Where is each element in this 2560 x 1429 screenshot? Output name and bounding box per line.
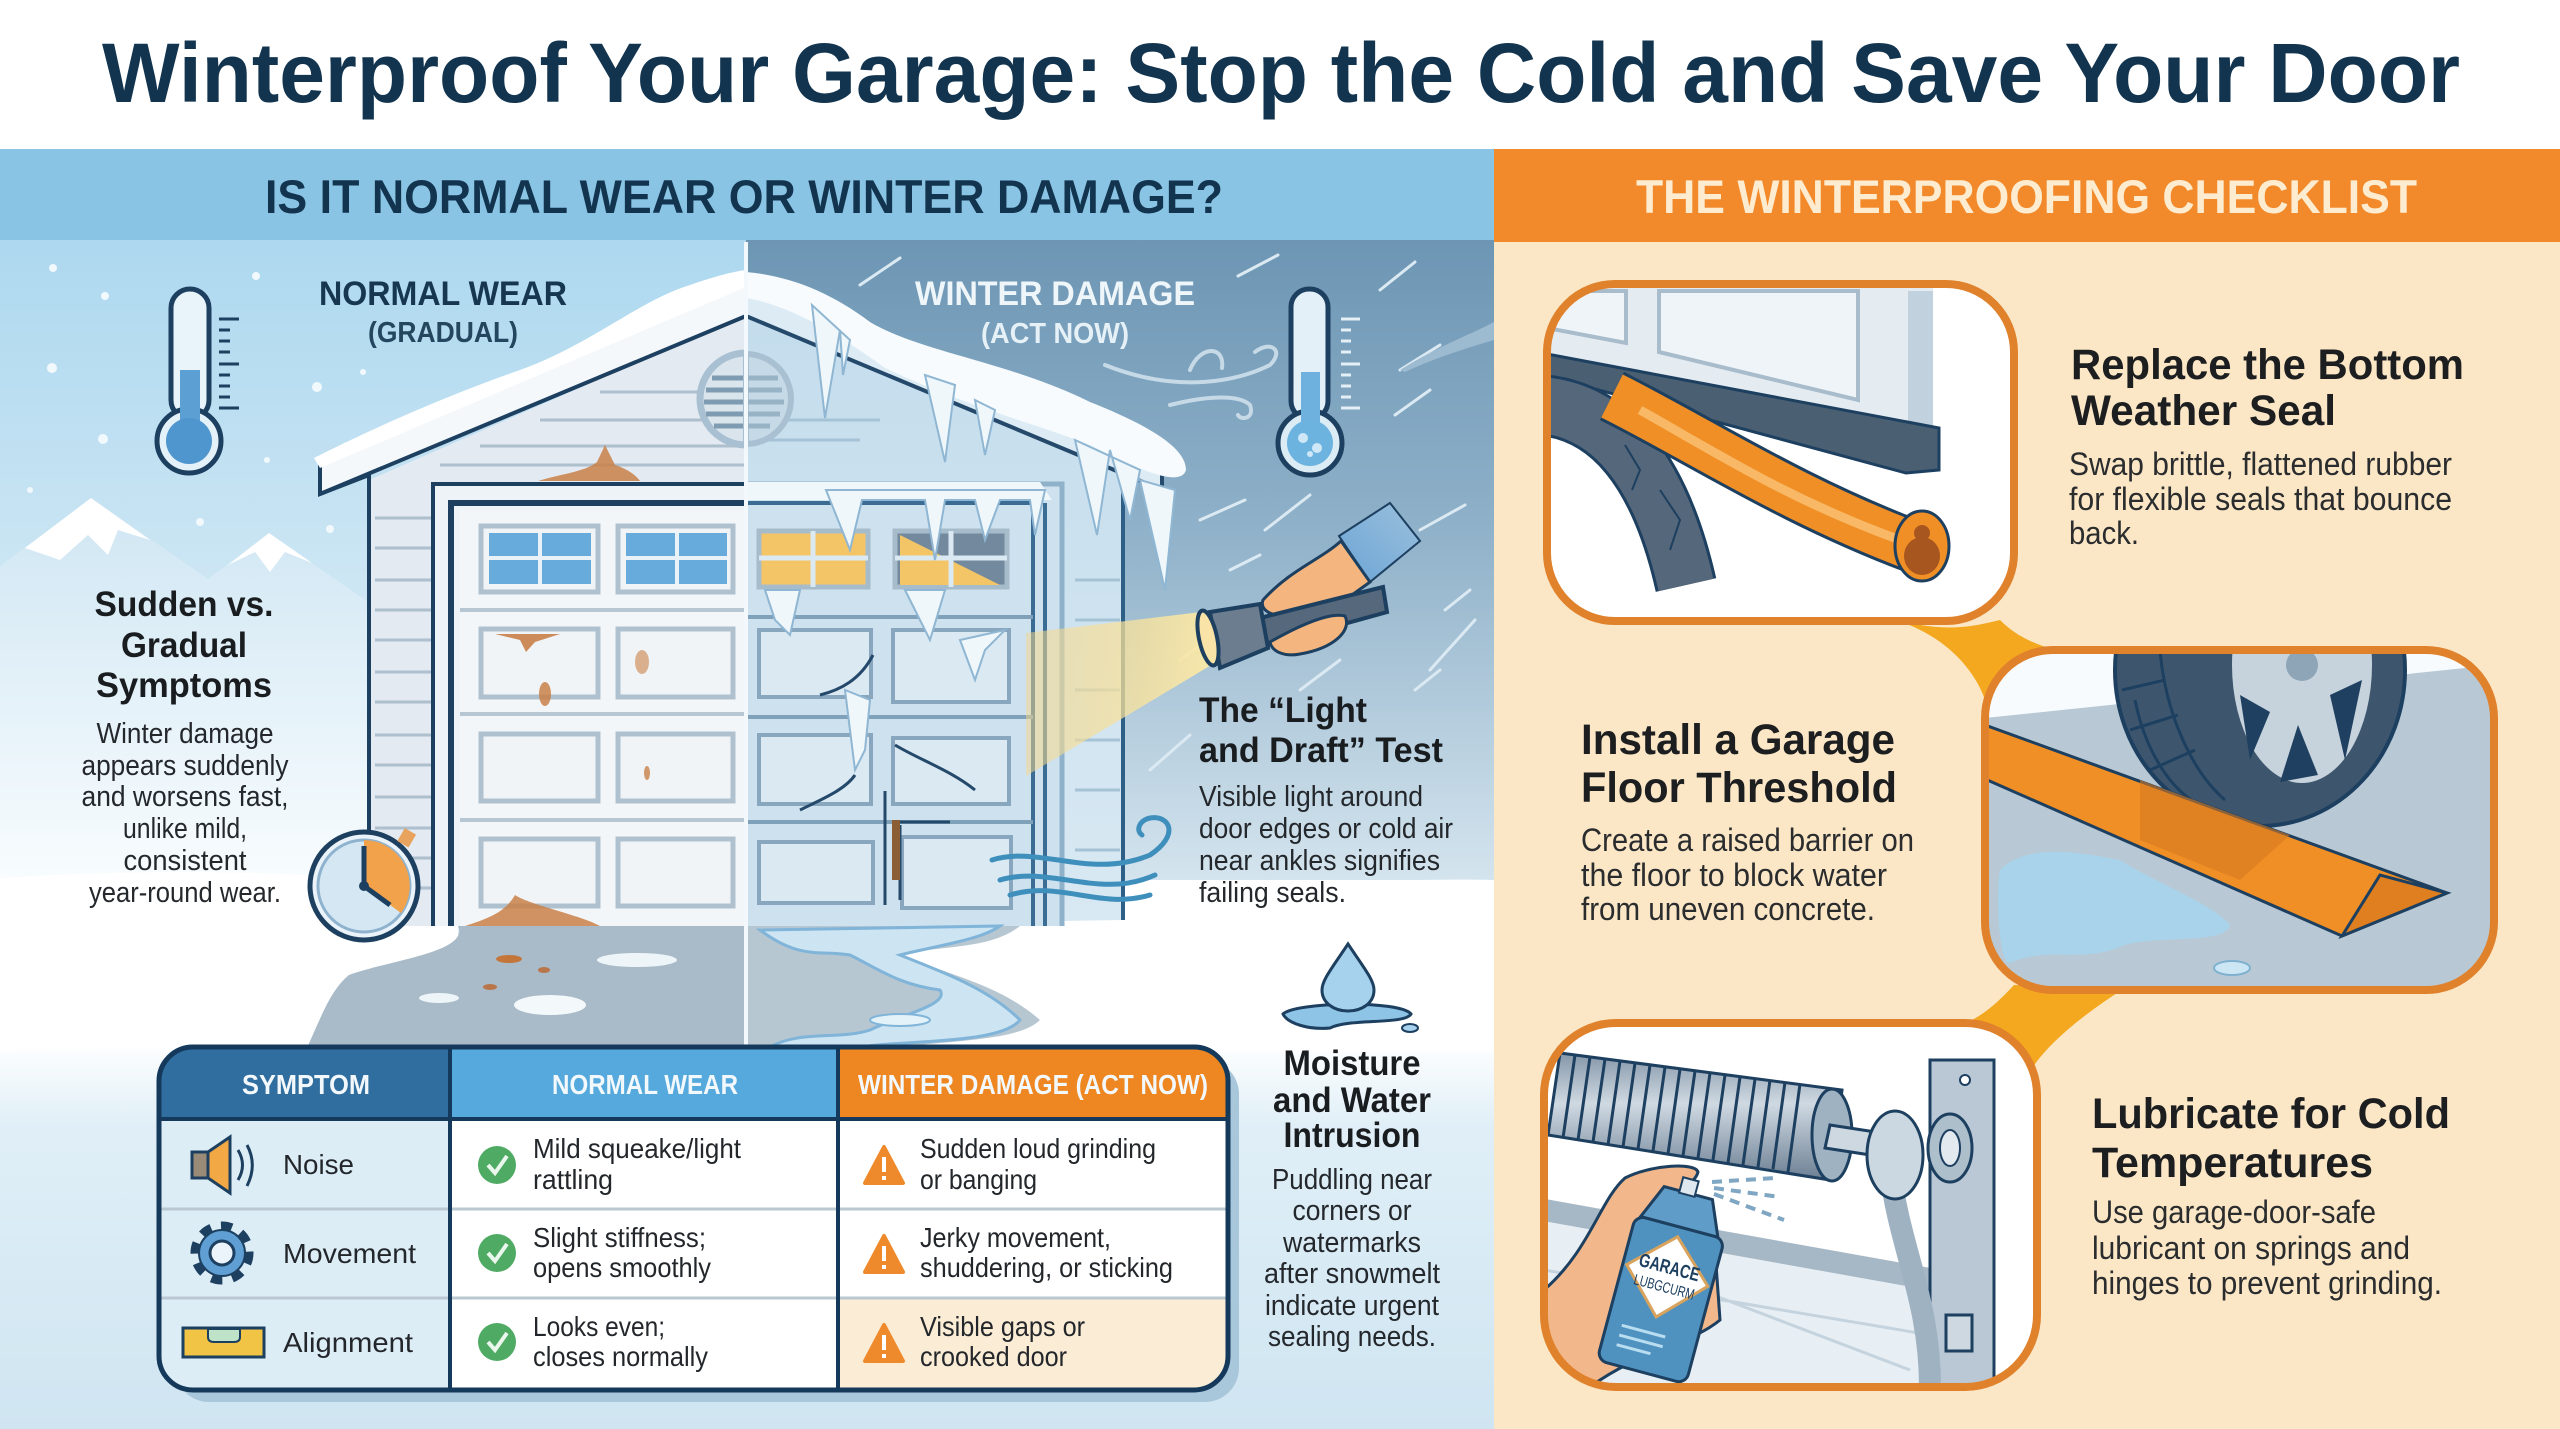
icon: level xyxy=(183,1328,264,1357)
thermometer: normal xyxy=(157,289,239,473)
text block: sudden vs gradual: consistent xyxy=(124,845,246,877)
panel: lower snow area xyxy=(0,1040,1494,1429)
table shadow xyxy=(175,1060,1239,1402)
title: Winterproof Your Garage: Stop the Cold and Save Your Door xyxy=(102,26,2460,120)
roof and snow: winter half xyxy=(746,272,1186,490)
text block: sudden vs gradual xyxy=(82,585,289,909)
table header labels: NORMAL WEAR xyxy=(552,1069,738,1100)
vent half xyxy=(746,354,791,444)
icon: gear xyxy=(195,1226,249,1280)
door frame xyxy=(433,484,746,926)
text block: light and draft test: and Draft” Test xyxy=(1199,731,1443,770)
text block: light and draft test: door edges or cold air xyxy=(1199,813,1453,845)
text block: moisture and water: Moisture xyxy=(1284,1044,1420,1083)
old cracked seal xyxy=(1540,405,1686,585)
label: winter damage: (ACT NOW) xyxy=(981,318,1129,350)
frozen door xyxy=(746,482,1062,926)
table header labels: WINTER DAMAGE (ACT NOW) xyxy=(858,1069,1208,1100)
rail xyxy=(1544,1210,1935,1280)
driveway concrete normal side xyxy=(306,926,746,1050)
roof: normal half xyxy=(314,270,746,494)
text block: moisture and water: sealing needs. xyxy=(1268,1321,1436,1353)
row: alignment: Alignment xyxy=(283,1327,413,1358)
tire xyxy=(2113,654,2407,828)
sleeve xyxy=(1339,503,1420,582)
panel: checklist background xyxy=(1494,242,2560,1429)
row: noise: Noise xyxy=(283,1149,354,1180)
icon: warning xyxy=(865,1147,903,1183)
text block: moisture and water: after snowmelt xyxy=(1264,1258,1440,1290)
snow ground left xyxy=(0,872,458,1050)
text block: lubricate: Use garage-door-safe xyxy=(2092,1194,2376,1230)
connector: card one to card two xyxy=(1895,620,2060,700)
text block: sudden vs gradual: Winter damage xyxy=(96,718,274,750)
row: alignment: closes normally xyxy=(533,1341,708,1372)
text block: moisture and water xyxy=(1264,1044,1440,1353)
row: alignment: Looks even; xyxy=(533,1311,665,1342)
flood on floor xyxy=(746,926,1040,1047)
card: bottom weather seal illustration xyxy=(1540,284,2014,621)
text block: threshold: from uneven concrete. xyxy=(1581,891,1875,927)
icon: warning xyxy=(865,1236,903,1272)
row: noise: rattling xyxy=(533,1164,613,1195)
divider: split between halves xyxy=(744,242,748,1047)
door xyxy=(1547,284,1939,473)
label: winter damage: WINTER DAMAGE xyxy=(915,275,1195,313)
door panels xyxy=(460,510,746,926)
water puddle xyxy=(1998,852,2230,963)
text block: replace seal: for flexible seals that bounce xyxy=(2069,481,2452,517)
text block: threshold xyxy=(1581,716,1914,927)
text block: replace seal: Weather Seal xyxy=(2071,387,2336,435)
icon: check xyxy=(478,1146,516,1184)
thermometer: winter xyxy=(1278,289,1360,475)
vent xyxy=(700,353,792,445)
text block: moisture and water: Intrusion xyxy=(1284,1116,1420,1155)
text block: light and draft test: failing seals. xyxy=(1199,877,1346,909)
label: winter damage xyxy=(915,275,1195,350)
wall siding xyxy=(369,315,746,926)
new orange seal xyxy=(1612,396,1949,581)
text block: sudden vs gradual: year-round wear. xyxy=(89,877,281,909)
text block: moisture and water: watermarks xyxy=(1282,1227,1421,1259)
snow ground right xyxy=(891,880,1494,1050)
heading bar: normal wear or winter damage xyxy=(0,149,1494,240)
hand arm xyxy=(1544,1166,1720,1387)
icon: water drop xyxy=(1283,944,1418,1032)
heading bar: checklist xyxy=(1494,149,2560,242)
spray can xyxy=(1598,1176,1724,1383)
icon: check xyxy=(478,1234,516,1272)
text block: light and draft test: Visible light around xyxy=(1199,781,1423,813)
card: threshold illustration xyxy=(1981,646,2498,994)
garage: normal half xyxy=(369,315,792,926)
row: noise xyxy=(192,1133,1156,1195)
hand back xyxy=(1262,541,1370,615)
row: alignment: crooked door xyxy=(920,1341,1067,1372)
flashlight and hand xyxy=(1193,503,1420,668)
panel: right sky winter side xyxy=(746,240,1494,880)
icon: speaker xyxy=(192,1137,252,1193)
table body xyxy=(159,1047,1228,1390)
panel: left sky normal side xyxy=(0,240,746,1070)
text block: sudden vs gradual: unlike mild, xyxy=(123,813,247,845)
shaft xyxy=(1823,1123,1870,1156)
row: noise: Sudden loud grinding xyxy=(920,1133,1156,1164)
label: normal wear: NORMAL WEAR xyxy=(319,275,567,313)
spray xyxy=(1712,1178,1784,1220)
text block: moisture and water: indicate urgent xyxy=(1265,1290,1439,1322)
cracks xyxy=(800,655,975,905)
ramp xyxy=(1985,725,2447,936)
comparison table xyxy=(159,1047,1239,1402)
card: lubricate illustration xyxy=(1544,1023,2037,1387)
text block: sudden vs gradual: and worsens fast, xyxy=(82,781,288,813)
icon: check xyxy=(478,1323,516,1361)
row: movement: opens smoothly xyxy=(533,1252,711,1283)
text block: light and draft test: near ankles signifies xyxy=(1199,845,1440,877)
rust stains xyxy=(465,445,650,926)
table header labels: SYMPTOM xyxy=(242,1069,370,1100)
spray can: LUBGCURM xyxy=(1632,1271,1696,1304)
text block: sudden vs gradual: Symptoms xyxy=(96,666,272,705)
text block: threshold: the floor to block water xyxy=(1581,857,1887,893)
text block: lubricate: Lubricate for Cold xyxy=(2092,1090,2450,1138)
row: movement xyxy=(195,1222,1173,1283)
row: noise: or banging xyxy=(920,1164,1037,1195)
mountains xyxy=(0,498,372,880)
text block: lubricate: Temperatures xyxy=(2092,1139,2373,1187)
row: movement: shuddering, or sticking xyxy=(920,1252,1173,1283)
fingers xyxy=(1270,615,1347,655)
text block: replace seal: Swap brittle, flattened rubber xyxy=(2069,446,2452,482)
text block: replace seal xyxy=(2069,341,2464,551)
icicles xyxy=(765,305,1175,770)
light beam xyxy=(1026,612,1213,776)
text block: replace seal: back. xyxy=(2069,515,2139,551)
spray can: GARACE xyxy=(1637,1250,1702,1286)
row: alignment: Visible gaps or xyxy=(920,1311,1085,1342)
cold draft lines xyxy=(992,818,1169,899)
garage: frozen half xyxy=(746,300,1123,926)
wind streaks and snow xyxy=(860,255,1494,770)
text block: threshold: Create a raised barrier on xyxy=(1581,822,1914,858)
text block: light and draft test xyxy=(1199,691,1453,909)
row: movement: Slight stiffness; xyxy=(533,1222,706,1253)
text block: moisture and water: corners or xyxy=(1292,1195,1412,1227)
table header labels xyxy=(242,1069,1208,1100)
flashlight body xyxy=(1193,587,1387,668)
spring xyxy=(1548,1053,1852,1181)
bracket xyxy=(1867,1060,1994,1387)
text block: light and draft test: The “Light xyxy=(1199,691,1367,730)
text block: lubricate: lubricant on springs and xyxy=(2092,1230,2410,1266)
icy wall xyxy=(746,300,1123,926)
stopwatch xyxy=(310,828,418,940)
row: noise: Mild squeake/light xyxy=(533,1133,741,1164)
text block: replace seal: Replace the Bottom xyxy=(2071,341,2464,389)
icon: warning xyxy=(865,1325,903,1361)
heading bar: normal wear or winter damage: IS IT NORMAL WEAR OR WINTER DAMAGE? xyxy=(265,170,1223,223)
frozen siding xyxy=(760,420,1120,850)
text block: moisture and water: and Water xyxy=(1273,1081,1431,1120)
text block: lubricate: hinges to prevent grinding. xyxy=(2092,1265,2442,1301)
text block: sudden vs gradual: Gradual xyxy=(121,626,247,665)
connector: card two to card three xyxy=(1962,985,2125,1070)
text block: moisture and water: Puddling near xyxy=(1272,1164,1432,1196)
row: movement: Jerky movement, xyxy=(920,1222,1111,1253)
text block: lubricate xyxy=(2092,1090,2450,1301)
row: movement: Movement xyxy=(283,1238,416,1269)
text block: threshold: Floor Threshold xyxy=(1581,764,1897,812)
text block: sudden vs gradual: appears suddenly xyxy=(82,750,289,782)
label: normal wear xyxy=(319,275,567,349)
heading bar: checklist: THE WINTERPROOFING CHECKLIST xyxy=(1636,170,2417,223)
snowflakes xyxy=(27,264,366,533)
label: normal wear: (GRADUAL) xyxy=(368,317,518,349)
text block: sudden vs gradual: Sudden vs. xyxy=(94,585,274,624)
title band xyxy=(0,0,2560,149)
row: alignment xyxy=(183,1311,1085,1372)
text block: threshold: Install a Garage xyxy=(1581,716,1895,764)
